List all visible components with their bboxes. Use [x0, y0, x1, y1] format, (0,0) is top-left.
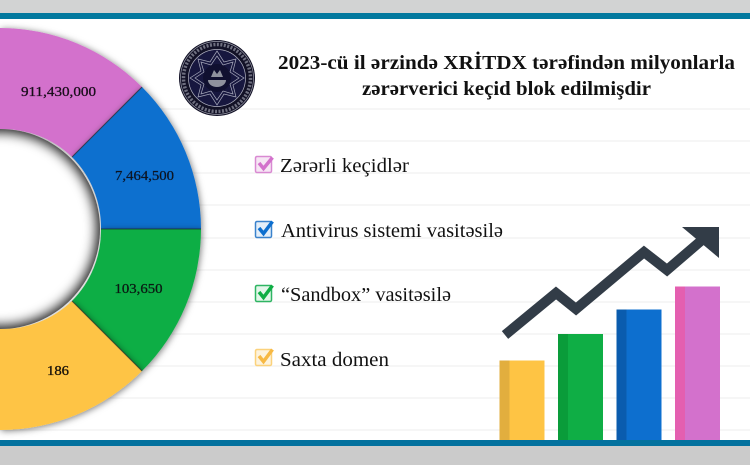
logo emblem — [179, 40, 255, 116]
title: 2023-cü il ərzində XRİTDX tərəfindən milyonlarla — [278, 50, 735, 74]
trend arrow — [505, 227, 719, 335]
legend item: yellow: Saxta domen — [280, 349, 389, 371]
legend — [256, 155, 503, 371]
bar: green — [558, 334, 603, 440]
bar: pink — [675, 286, 720, 440]
bottom band — [0, 440, 750, 465]
bar: yellow — [500, 360, 544, 440]
segment edges — [72, 87, 201, 371]
segment: yellow — [0, 301, 142, 430]
legend item: blue: Antivirus sistemi vasitəsilə — [281, 220, 503, 242]
segment: pink — [0, 28, 142, 157]
title — [278, 50, 735, 100]
legend item: green: “Sandbox” vasitəsilə — [281, 284, 451, 306]
donut hole with inner shadow — [0, 124, 105, 334]
label: green value: 103,650 — [114, 282, 162, 297]
title: zərərverici keçid blok edilmişdir — [362, 78, 651, 100]
top band — [0, 0, 750, 19]
background ruled lines — [0, 109, 750, 430]
segment: green — [72, 229, 201, 371]
bar: blue — [616, 310, 662, 440]
segment: blue — [72, 87, 201, 229]
label: pink value: 911,430,000 — [21, 85, 96, 100]
bar chart illustration — [500, 227, 720, 440]
label: yellow value: 186 — [47, 364, 69, 379]
legend item: pink: Zərərli keçidlər — [280, 155, 409, 177]
label: blue value: 7,464,500 — [115, 169, 174, 184]
donut chart — [0, 28, 201, 430]
